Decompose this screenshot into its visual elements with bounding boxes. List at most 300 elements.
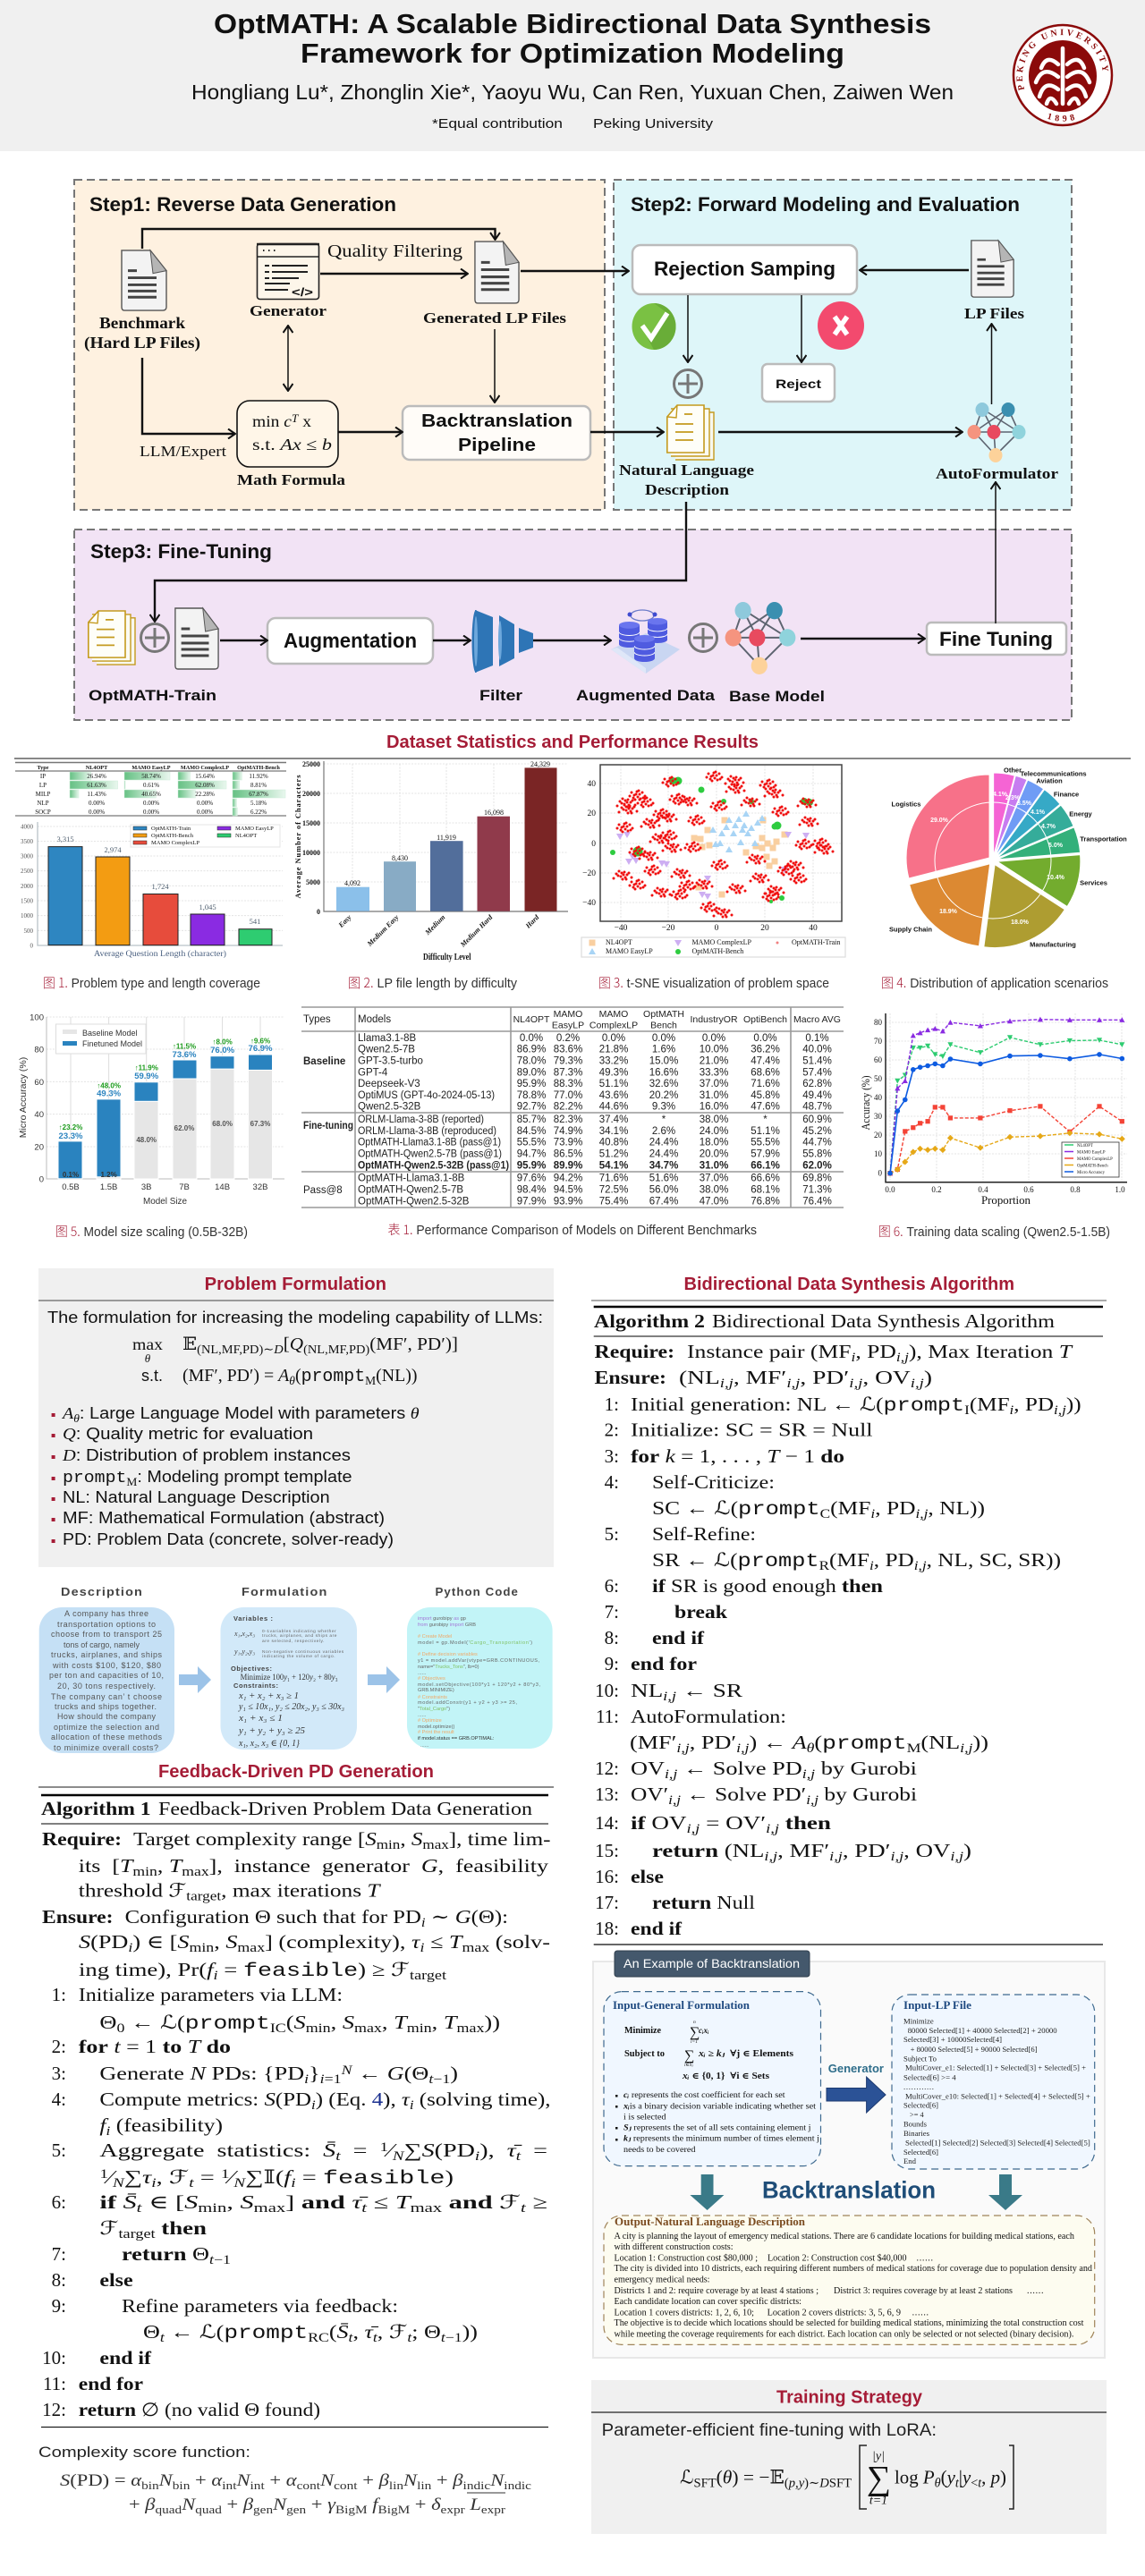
box: input general formulation: Minimize: [624, 2026, 662, 2036]
line chart legend: NL4OPT: [1077, 1144, 1093, 1148]
formulation bubble: Variables :: [233, 1614, 273, 1623]
table 1: performance comparison: 16.0%: [700, 1102, 728, 1113]
algorithm 2: 2:: [605, 1419, 619, 1441]
icon: generated LP files: [474, 240, 520, 304]
complexity score function: [38, 2444, 531, 2516]
figure 1: question length bar chart: 500: [23, 928, 34, 935]
figure 1: problem type table: 5.18%: [250, 800, 267, 807]
table 1: performance comparison: EasyLP: [552, 1021, 584, 1031]
loss equation: log Pθ(yt|y<t, p): [895, 2467, 1006, 2491]
chart legend: OptMATH-Bench: [151, 833, 194, 839]
table 1: performance comparison: 0.1%: [805, 1033, 829, 1044]
table 1: performance comparison: 77.0%: [554, 1090, 582, 1101]
formulation bubble: x₁ + x₃ ≤ 1: [238, 1714, 283, 1724]
description bubble: optimize the selection and: [54, 1723, 159, 1732]
box: output natural language description: District 3: requires coverage by at least 2 stations: [834, 2286, 1013, 2296]
algorithm 1: for t = 1 to T do: [79, 2036, 231, 2057]
figure 4: application scenario pie chart: 10.4%: [1047, 875, 1065, 881]
algorithm 1: 7:: [52, 2243, 66, 2265]
figure 1: problem type table: 15.64%: [195, 773, 215, 780]
figure 1: problem type table: NL4OPT: [86, 765, 108, 771]
box: output natural language description: The objective is to decide which locations should be selected for building medical stations, minimizing the total construction cost: [614, 2318, 1084, 2328]
objective equation: θ: [145, 1352, 151, 1365]
figure 6: training data scaling line chart: 10: [874, 1149, 882, 1158]
algorithm 2: OV i,j ← Solve PD i,j by Gurobi: [631, 1758, 917, 1782]
table 1: performance comparison: 85.7%: [517, 1114, 546, 1125]
table 1: performance comparison: OptMATH: [643, 1009, 684, 1020]
table 1: performance comparison: 76.4%: [802, 1196, 832, 1207]
figure 1: problem type table: 0.00%: [89, 800, 105, 807]
algorithm 2: Self-Refine:: [652, 1523, 756, 1545]
complexity score function: + βquadNquad + βgenNgen + γBigM fBigM + δexpr Lexpr: [129, 2496, 506, 2516]
algorithm 2: 8:: [605, 1627, 619, 1648]
table 1: performance comparison: 97.9%: [517, 1196, 546, 1207]
figure 1: problem type table: MAMO ComplexLP: [181, 765, 229, 771]
figure 4: application scenario pie chart: 18.0%: [1011, 919, 1030, 926]
authors: Hongliang Lu*, Zhonglin Xie*, Yaoyu Wu, Can Ren, Yuxuan Chen, Zaiwen Wen: [191, 80, 954, 104]
formulation bubble: indicating the volume of cargo.: [262, 1654, 335, 1659]
python code bubble: # Create Model: [418, 1634, 452, 1640]
algorithm 2: Require:: [594, 1341, 674, 1362]
algorithm 1: Initialize parameters via LLM:: [79, 1984, 343, 2005]
table 1: performance comparison: GPT-3.5-turbo: [358, 1055, 423, 1066]
algorithm 2: Initial generation: NL ← ℒ( prompt I(MF i, PD i,j)): [631, 1394, 1081, 1418]
figure 5: model size stacked bar chart: Model Size: [143, 1196, 187, 1207]
formulation bubble: [220, 1607, 357, 1750]
section heading: feedback-driven PD generation: Feedback-Driven PD Generation: [158, 1762, 434, 1782]
figure 6: training data scaling line chart: 80: [874, 1018, 882, 1027]
table 1: performance comparison: 21.8%: [599, 1045, 628, 1055]
python code bubble: # Constraints: [418, 1695, 447, 1700]
figure 6: training data scaling line chart: Accuracy (%): [859, 1075, 872, 1131]
figure 1: problem type table: OptMATH-Bench: [237, 765, 280, 771]
description bubble: trucks and ships together.: [55, 1702, 157, 1711]
figure 5: model size stacked bar chart: 48.0%: [136, 1136, 157, 1144]
figure 1: problem type table: MILP: [36, 791, 50, 798]
table 1: performance comparison: 16.6%: [649, 1067, 678, 1078]
figure 1: problem type table: 0.00%: [143, 800, 159, 807]
affiliation note: *Equal contribution: [432, 117, 563, 131]
figure 4: application scenario pie chart: [889, 766, 1127, 948]
figure 4: application scenario pie chart: Finance: [1054, 791, 1079, 798]
chart legend: NL4OPT: [235, 833, 257, 839]
table 1: performance comparison: 38.0%: [700, 1185, 728, 1196]
column headings: Formulation: [242, 1586, 327, 1598]
table 1: performance comparison: GPT-4: [358, 1067, 388, 1078]
figure 1: problem type table: 11.43%: [87, 791, 106, 798]
algorithm 1: end if: [99, 2347, 152, 2368]
figure 2: LP file length bar chart: Hard: [523, 912, 541, 930]
table 1: performance comparison: 67.4%: [649, 1196, 678, 1207]
figure 4: application scenario pie chart: Supply Chain: [889, 925, 932, 934]
algorithm 1: Ensure:: [42, 1906, 113, 1928]
line chart legend: MAMO ComplexLP: [1077, 1157, 1113, 1162]
table 1: performance comparison: 31.0%: [700, 1090, 728, 1101]
algorithm 2: Bidirectional Data Synthesis Algorithm: [712, 1310, 1055, 1332]
table 1: performance comparison: 54.1%: [599, 1160, 628, 1171]
figure 2: LP file length bar chart: 10000: [302, 849, 320, 857]
table 1: performance comparison: 20.2%: [649, 1090, 678, 1101]
chart legend: MAMO ComplexLP: [151, 840, 199, 846]
table 1: performance comparison: 2.6%: [652, 1126, 675, 1137]
algorithm 2: return Null: [652, 1892, 755, 1913]
table 1: performance comparison: 31.0%: [700, 1160, 728, 1171]
algorithm 2: end if: [631, 1918, 683, 1939]
generator label: Generator: [250, 302, 327, 319]
box: input LP file: Selected[6]: [903, 2148, 938, 2157]
description bubble: How should the company: [57, 1712, 156, 1721]
figure 5: model size stacked bar chart: 49.3%: [97, 1089, 122, 1098]
column headings: Python Code: [435, 1586, 519, 1598]
table 1: performance comparison: OptMATH-Llama3.1-8B: [358, 1174, 465, 1184]
caption figure 4: 图 4. Distribution of application scenarios: [881, 973, 1108, 992]
algorithm 1: Compute metrics: S(PD i) (Eq. 4), τi (solving time),: [99, 2089, 551, 2113]
algorithm 2: 14:: [595, 1812, 619, 1834]
figure 5: model size stacked bar chart: 23.3%: [59, 1131, 83, 1141]
table 1: performance comparison: 24.0%: [700, 1126, 728, 1137]
caption figure 3: 图 3. t-SNE visualization of problem space: [598, 973, 829, 992]
table 1: performance comparison: OptMATH-Llama3.1-8B (pass@1): [358, 1138, 501, 1148]
algorithm 2: 11:: [596, 1706, 619, 1727]
figure 1: problem type table: 22.28%: [195, 791, 215, 798]
section heading: bidirectional data synthesis algorithm: Bidirectional Data Synthesis Algorithm: [683, 1275, 1014, 1294]
figure 5: model size stacked bar chart: 0.1%: [63, 1171, 79, 1179]
math formula box: s.t. Ax ≤ b: [252, 436, 332, 453]
algorithm 2: 17:: [595, 1892, 619, 1913]
figure 1: problem type table: 67.87%: [249, 791, 268, 798]
python code bubble: model.addConstr(y1 + y2 + y3 >= 25,: [418, 1700, 517, 1706]
table 1: performance comparison: OptMATH-Qwen2.5-7B: [358, 1185, 463, 1196]
table 1: performance comparison: *: [763, 1114, 768, 1125]
figure 1: problem type table: 11.92%: [249, 773, 268, 780]
fine tuning box: [927, 623, 1066, 655]
table 1: performance comparison: OptMATH-Qwen2.5-32B: [358, 1196, 470, 1207]
table 1: performance comparison: 55.5%: [517, 1138, 546, 1148]
icon: augmented data: [611, 610, 680, 674]
LP files label: LP Files: [964, 305, 1024, 322]
table 1: performance comparison: 43.6%: [599, 1090, 628, 1101]
figure 1: problem type table: 40.65%: [141, 791, 161, 798]
figure 1: problem type table: LP: [39, 782, 47, 789]
python code bubble: import gurobipy as gp: [418, 1616, 466, 1622]
figure 2: LP file length bar chart: [293, 760, 568, 962]
math formula label: Math Formula: [237, 471, 346, 488]
python code bubble: "Total_Cargo"): [418, 1707, 450, 1712]
table 1: performance comparison: 32.6%: [649, 1079, 678, 1089]
table 1: performance comparison: 83.6%: [554, 1045, 582, 1055]
scatter legend: MAMO ComplexLP: [692, 938, 751, 946]
box: output natural language description: with different construction costs:: [614, 2242, 734, 2252]
table 1: performance comparison: [301, 1007, 844, 1208]
figure 2: LP file length bar chart: 8,430: [392, 854, 408, 862]
box: input LP file: + 80000 Selected[5] + 90000 Selected[6]: [911, 2045, 1038, 2054]
figure 1: problem type table: 0.00%: [89, 809, 105, 816]
box: input general formulation: Input-General Formulation: [613, 1998, 751, 2012]
table 1: performance comparison: 51.1%: [599, 1079, 628, 1089]
figure 2: LP file length bar chart: 4,092: [344, 879, 360, 887]
figure 6: training data scaling line chart: 70: [874, 1037, 882, 1046]
figure 1: problem type table: NLP: [37, 800, 49, 807]
table 1: performance comparison: 51.1%: [751, 1126, 780, 1137]
box: input general formulation: n: [693, 2020, 696, 2025]
algorithm 2: return (NL i,j, MF′ i,j, PD′ i,j, OV i,j): [652, 1840, 971, 1864]
table 1: performance comparison: 93.9%: [554, 1196, 582, 1207]
description bubble: [39, 1607, 174, 1753]
algorithm 2: [594, 1307, 1103, 1945]
table 1: performance comparison: 47.4%: [751, 1055, 780, 1066]
box: input LP file: Subject To: [903, 2055, 937, 2063]
down arrow right: [988, 2174, 1022, 2210]
table 1: performance comparison: 76.8%: [751, 1196, 780, 1207]
table 1: performance comparison: 34.1%: [599, 1126, 628, 1137]
figure 1: problem type table: 8.81%: [250, 782, 267, 789]
table 1: performance comparison: 68.1%: [751, 1185, 780, 1196]
bar legend: Baseline Model: [82, 1029, 138, 1038]
table 1: performance comparison: 37.0%: [700, 1174, 728, 1184]
algorithm 1: ing time), Pr( fi = feasible ) ≥ ℱ target: [79, 1959, 446, 1983]
figure 3: t-SNE scatter plot: 40: [587, 780, 596, 789]
table 1: performance comparison: 24.4%: [649, 1138, 678, 1148]
table 1: performance comparison: 1.6%: [652, 1045, 675, 1055]
table 1: performance comparison: 71.6%: [599, 1174, 628, 1184]
figure 4: application scenario pie chart: 2.3%: [1005, 795, 1021, 801]
figure 2: LP file length bar chart: 16,098: [484, 809, 504, 817]
figure 2: LP file length bar chart: Medium Easy: [365, 913, 401, 948]
algorithm 2: break: [674, 1601, 727, 1623]
affiliation note: Peking University: [593, 117, 714, 131]
table 1: performance comparison: 49.4%: [802, 1090, 832, 1101]
figure 6: training data scaling line chart: 50: [874, 1074, 882, 1083]
header band: [0, 0, 1145, 151]
algorithm 2: end if: [652, 1627, 705, 1648]
table 1: performance comparison: 92.7%: [517, 1102, 546, 1113]
down arrow left: [690, 2174, 724, 2210]
algorithm 2: for k = 1, . . . , T − 1 do: [631, 1445, 844, 1467]
chart legend: OptMATH-Train: [151, 826, 191, 832]
benchmark label: Benchmark: [99, 314, 185, 332]
table 1: performance comparison: 57.4%: [802, 1067, 832, 1078]
table 1: performance comparison: 55.5%: [751, 1138, 780, 1148]
figure 4: application scenario pie chart: 29.0%: [930, 818, 949, 824]
icon: Peking University seal: [1013, 23, 1113, 127]
table 1: performance comparison: 71.6%: [751, 1079, 780, 1089]
figure 2: LP file length bar chart: 5000: [306, 878, 320, 886]
description bubble: transportation options to: [57, 1620, 156, 1629]
box: input LP file: Bounds: [903, 2120, 928, 2129]
box: output natural language description: The city is divided into 10 districts, each requiring different numbers of medical stations for coverage due to population density and: [614, 2264, 1092, 2274]
figure 5: model size stacked bar chart: [18, 1013, 284, 1207]
table 1: performance comparison: 36.2%: [751, 1045, 780, 1055]
figure 2: LP file length bar chart: 24,329: [530, 760, 550, 768]
loss equation: [680, 2445, 1014, 2509]
figure 1: problem type table: [15, 762, 286, 816]
algorithm 1: Refine parameters via feedback:: [122, 2295, 398, 2317]
figure 1: question length bar chart: [21, 822, 283, 958]
table 1: performance comparison: 75.4%: [599, 1196, 628, 1207]
definitions list: prompt M: Modeling prompt template: [63, 1468, 352, 1488]
icon: LP files: [971, 239, 1014, 298]
figure 2: LP file length bar chart: Average Number of Characters: [293, 775, 302, 898]
formulation bubble: Objectives:: [231, 1665, 272, 1673]
table 1: performance comparison: 0.0%: [602, 1033, 625, 1044]
algorithm 1: 3:: [52, 2063, 66, 2084]
natural language description label: [619, 462, 755, 498]
box: input general formulation: kⱼ represents the minimum number of times element j: [623, 2134, 819, 2144]
figure 6: training data scaling line chart: 20: [874, 1131, 882, 1140]
algorithm 1: return Θ t−1: [122, 2243, 231, 2267]
figure 2: LP file length bar chart: 0: [317, 908, 320, 916]
box: input general formulation: [604, 1992, 821, 2166]
python code bubble: if model.status == GRB.OPTIMAL:: [418, 1736, 495, 1741]
augmented data label: Augmented Data: [576, 687, 716, 704]
figure 3: t-SNE scatter plot: 20: [760, 924, 769, 933]
reject box: Reject: [776, 377, 821, 391]
scatter legend: OptMATH-Train: [792, 938, 840, 946]
table 1: performance comparison: 44.7%: [802, 1138, 832, 1148]
algorithm 1: Algorithm 1: [41, 1798, 151, 1819]
figure 5: model size stacked bar chart: 40: [34, 1110, 44, 1120]
figure 1: problem type table: 0.61%: [143, 782, 159, 789]
table 1: performance comparison: 49.3%: [599, 1067, 628, 1078]
box: input general formulation: i∈Sⱼ: [684, 2063, 693, 2068]
box: input LP file: Selected[6]: [903, 2100, 938, 2109]
chart legend: MAMO EasyLP: [235, 826, 274, 832]
figure 6: training data scaling line chart: 60: [874, 1055, 882, 1064]
box: output natural language description: Location 2: Construction cost $40,000: [768, 2253, 907, 2263]
figure 5: model size stacked bar chart: 20: [34, 1143, 44, 1152]
table 1: performance comparison: 48.7%: [802, 1102, 832, 1113]
figure 5: model size stacked bar chart: ↑8.0%: [212, 1038, 233, 1046]
figure 6: training data scaling line chart: 0.0: [885, 1185, 895, 1194]
description bubble: with costs $100, $120, $80: [52, 1661, 161, 1670]
benchmark label: (Hard LP Files): [84, 334, 200, 352]
generator arrow: [827, 2062, 886, 2113]
math formula box: min cT x: [252, 412, 311, 430]
rejection sampling box: [632, 245, 857, 294]
figure 3: t-SNE scatter plot: 40: [809, 924, 818, 933]
python code bubble: ......: [418, 1671, 427, 1676]
figure 6: training data scaling line chart: 0.8: [1070, 1185, 1081, 1194]
figure 5: model size stacked bar chart: 3B: [141, 1182, 152, 1192]
algorithm 1: Target complexity range [ Smin, Smax], time lim-: [133, 1828, 551, 1852]
table 1: performance comparison: 71.3%: [802, 1185, 832, 1196]
panel: step 1 reverse data generation: [74, 180, 605, 510]
description bubble: to minimize overall costs?: [54, 1743, 158, 1752]
table 1: performance comparison: 79.3%: [554, 1055, 582, 1066]
box: input LP file: Selected[3] + 10000Selected[4]: [903, 2035, 1002, 2044]
table 1: performance comparison: 51.4%: [802, 1055, 832, 1066]
algorithm 1: Θ 0 ← ℒ( prompt IC(Smin , Smax , Tmin , Tmax )): [99, 2012, 500, 2036]
figure 1: question length bar chart: 1,724: [151, 882, 169, 891]
table 1: performance comparison: 60.9%: [802, 1114, 832, 1125]
box: input LP file: Binaries: [903, 2129, 930, 2138]
line chart legend: OptMATH-Bench: [1077, 1165, 1108, 1168]
table 1: performance comparison: MAMO: [599, 1009, 628, 1020]
table 1: performance comparison: 20.0%: [700, 1149, 728, 1160]
figure 1: problem type table: 61.63%: [87, 782, 106, 789]
figure 1: problem type table: SOCP: [35, 809, 51, 816]
figure 4: application scenario pie chart: 5.0%: [1048, 843, 1064, 849]
box: output natural language description: Location 1: Construction cost $80,000 ;: [614, 2253, 758, 2263]
objective equation: max: [132, 1335, 163, 1353]
scatter legend: NL4OPT: [606, 938, 632, 946]
figure 5: model size stacked bar chart: 0.5B: [62, 1182, 80, 1192]
figure 4: application scenario pie chart: Telecommunications: [1021, 769, 1087, 778]
box: output natural language description: Each candidate location can cover specific districts:: [614, 2297, 802, 2307]
figure 3: t-SNE scatter plot: −40: [615, 924, 628, 933]
python code bubble: model.setObjective(100*y1 + 120*y2 + 80*y3,: [418, 1682, 540, 1688]
python code bubble: GRB.MINIMIZE): [418, 1688, 454, 1693]
figure 4: application scenario pie chart: Manufacturing: [1030, 941, 1076, 948]
algorithm 2: 1:: [605, 1394, 619, 1415]
box: input general formulation: i=1: [691, 2039, 698, 2045]
table 1: performance comparison: 38.0%: [700, 1114, 728, 1125]
table 1: performance comparison: 78.0%: [517, 1055, 546, 1066]
algorithm 2: 5:: [605, 1523, 619, 1545]
table 1: performance comparison: 0.0%: [652, 1033, 675, 1044]
reject box: [762, 364, 835, 402]
filter label: Filter: [479, 687, 522, 704]
algorithm 2: if SR is good enough then: [652, 1575, 883, 1597]
table 1: performance comparison: 56.0%: [649, 1185, 678, 1196]
definitions list: Aθ: Large Language Model with parameters θ: [62, 1404, 420, 1425]
algorithm 1: if S̄ t ∈ [ S min , S max ] and τ̄t ≤ T max and ℱ t ≥: [99, 2191, 547, 2216]
table 1: performance comparison: OptMATH-Qwen2.5-7B (pass@1): [358, 1149, 502, 1160]
figure 3: t-SNE scatter plot: [581, 765, 845, 957]
scatter legend: OptMATH-Bench: [692, 947, 743, 955]
box: input LP file: MultiCover_e1: Selected[1] + Selected[3] + Selected[5] +: [905, 2063, 1086, 2072]
table 1: performance comparison: 45.8%: [751, 1090, 780, 1101]
figure 3: t-SNE scatter plot: 0: [591, 840, 596, 849]
algorithm 2: AutoFormulation:: [631, 1706, 786, 1727]
figure 5: model size stacked bar chart: 0: [39, 1175, 44, 1184]
figure 6: training data scaling line chart: 0.2: [931, 1185, 942, 1194]
arrow: [368, 1666, 400, 1693]
panel: problem formulation: [38, 1268, 554, 1567]
figure 1: problem type table: 58.74%: [141, 773, 161, 780]
objective equation: s.t.: [141, 1367, 163, 1385]
description bubble: choose from to transport 25: [51, 1630, 162, 1639]
icon: AutoFormulator network: [968, 402, 1025, 462]
figure 5: model size stacked bar chart: 7B: [179, 1182, 190, 1192]
algorithm 2: 4:: [605, 1471, 619, 1493]
box: input LP file: MultiCover_e10: Selected[1] + Selected[4] + Selected[5] +: [905, 2091, 1090, 2100]
formulation bubble: are selected, respectively.: [262, 1639, 325, 1644]
algorithm 2: 6:: [605, 1575, 619, 1597]
table 1: performance comparison: Macro AVG: [793, 1014, 841, 1025]
table 1: performance comparison: 94.2%: [554, 1174, 582, 1184]
figure 1: question length bar chart: 3000: [21, 853, 34, 860]
bar legend: Finetuned Model: [82, 1039, 142, 1048]
definitions list: MF: Mathematical Formulation (abstract): [63, 1509, 385, 1527]
figure 4: application scenario pie chart: Transportation: [1080, 835, 1127, 843]
augmentation box: Augmentation: [284, 629, 417, 652]
figure 5: model size stacked bar chart: 1.2%: [100, 1171, 117, 1179]
figure 5: model size stacked bar chart: 32B: [253, 1182, 267, 1192]
table 1: performance comparison: 88.3%: [554, 1079, 582, 1089]
python code bubble: # Print the result: [418, 1730, 454, 1735]
python code bubble: ......: [420, 1743, 429, 1749]
figure 1: problem type table: IP: [40, 773, 46, 780]
algorithm 1: its [ Tmin , Tmax ], instance generator G, feasibility: [79, 1855, 549, 1879]
table 1: performance comparison: 55.8%: [802, 1149, 832, 1160]
figure 6: training data scaling line chart: 0.4: [978, 1185, 988, 1194]
caption figure 5: 图 5. Model size scaling (0.5B-32B): [55, 1222, 248, 1241]
algorithm 1: 2:: [52, 2036, 66, 2057]
formulation bubble: y₁ + y₂ + y₃ ≥ 25: [238, 1726, 305, 1736]
python code bubble: [407, 1607, 553, 1749]
table 1: performance comparison: 40.0%: [802, 1045, 832, 1055]
